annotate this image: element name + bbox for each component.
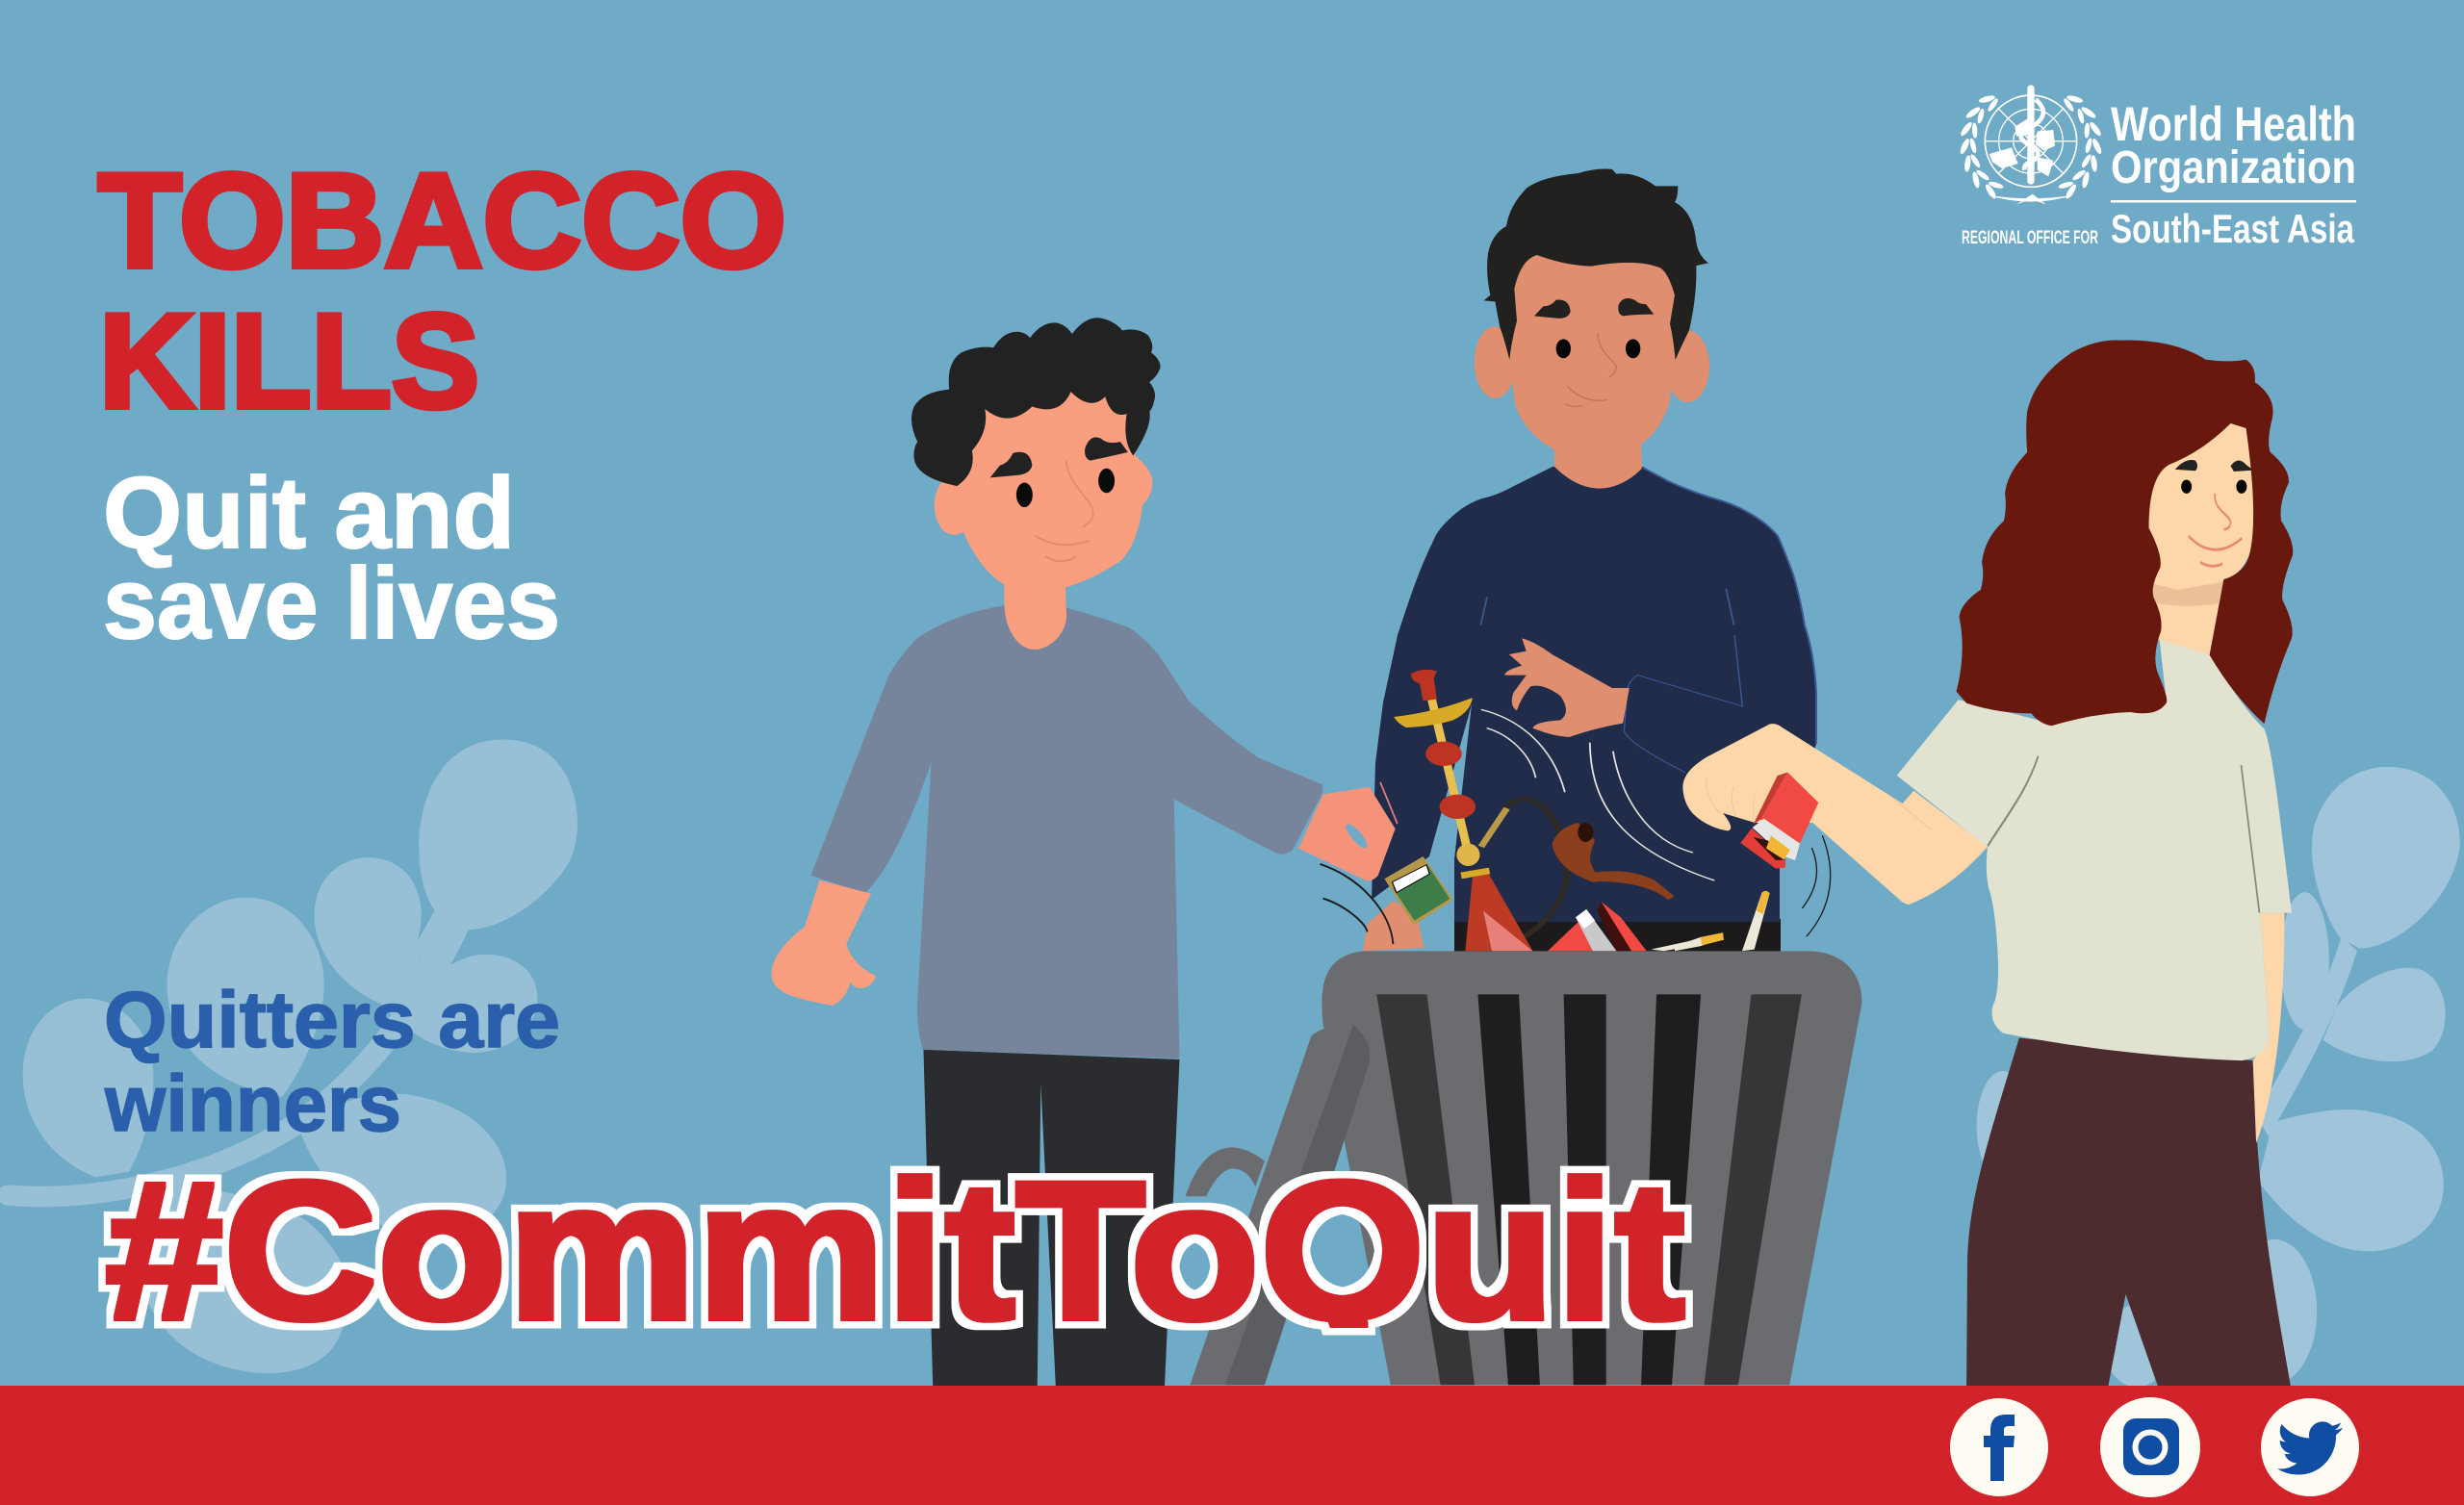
woman trousers (1966, 1038, 2291, 1386)
text: Quitters are winners: Quitters are (104, 975, 560, 1064)
boy right hand (1298, 787, 1396, 880)
man trousers (1454, 919, 1781, 957)
hashtag: CommitToQuit: #CommitToQuit (105, 1141, 1685, 1361)
bin stripes (1376, 994, 1475, 1385)
man eyebrows (1534, 298, 1654, 319)
boy hand motion lines (1320, 864, 1393, 944)
footer red band (0, 1386, 2464, 1505)
woman lowered arm (2253, 913, 2285, 1143)
man neck and head (1475, 168, 1734, 625)
woman raised arm and hand (1682, 724, 1988, 905)
motion lines (1481, 709, 1714, 880)
logo: World Health Organization South-East Asia: South-East Asia (2111, 206, 2355, 251)
boy face (935, 382, 1152, 587)
background leaves: right branch (1977, 767, 2460, 1387)
woman nose and mouth (2189, 494, 2242, 566)
subtitle: Quit and save lives: Quit and (103, 457, 515, 570)
logo: World Health Organization South-East Asia: REGIONAL OFFICE FOR (1962, 228, 2098, 248)
illustration: trash bin (1186, 951, 1861, 1385)
woman neck (2149, 579, 2223, 655)
icon: facebook (1950, 1398, 2048, 1496)
hookah (1394, 670, 1568, 951)
man nose and mouth (1566, 333, 1616, 406)
icon: twitter (2261, 1398, 2359, 1496)
woman shirt (1897, 634, 2292, 1060)
man eyes (1556, 339, 1571, 358)
WHO name: World Health (2111, 97, 2356, 151)
title: Tobacco Kills (98, 146, 786, 436)
pipe (1552, 823, 1675, 900)
logo: World Health Organization South-East Asia (1959, 85, 2356, 251)
illustration: woman in cream shirt (1675, 340, 2293, 1386)
boy eyes (1016, 483, 1033, 507)
boy neck (1004, 578, 1066, 650)
woman face (2141, 411, 2254, 590)
loose cigarette (1651, 933, 1724, 951)
man sweater (1372, 467, 1816, 922)
text: Quitters are winners: winners (104, 1059, 401, 1148)
bin lid handle (1186, 1147, 1265, 1196)
green tobacco box (1384, 856, 1453, 926)
woman shirt creases (1988, 756, 2259, 913)
man hand and sleeve (1363, 635, 1742, 951)
man collar seam lines (1480, 589, 1734, 625)
illustration: man with navy sweater (1363, 168, 1816, 957)
subtitle: Quit and save lives (103, 457, 560, 660)
background leaves: left branch (10, 739, 578, 1373)
subtitle: Quit and save lives: save lives (103, 548, 560, 660)
title: Tobacco Kills: KILLS (99, 287, 479, 436)
bin body (1322, 951, 1861, 1385)
illustration: boy in grey shirt (771, 318, 1398, 1389)
man hair (1484, 168, 1708, 360)
boy nose and mouth (1036, 461, 1093, 561)
bin lid (1190, 1025, 1353, 1385)
boy left hand (771, 880, 876, 1006)
logo: World Health Organization South-East Asia: Organization (2111, 142, 2356, 193)
boy trousers (923, 1050, 1180, 1389)
icon: instagram (2100, 1397, 2200, 1497)
woman hair (1957, 340, 2293, 726)
cigarette pack and cigarette near woman's hand (1675, 773, 1831, 951)
title: Tobacco Kills: TOBACCO (98, 146, 786, 295)
illustration: tobacco products falling into bin (1384, 670, 1724, 951)
WHO emblem (1959, 85, 2103, 205)
text: Quitters are winners (104, 975, 560, 1148)
fallen cigarette pack (1548, 902, 1647, 951)
boy shirt (810, 605, 1323, 1059)
boy eyebrows (990, 437, 1128, 477)
boy hair (911, 318, 1160, 486)
woman eyes (2181, 480, 2192, 494)
woman eyebrows (2175, 460, 2253, 472)
